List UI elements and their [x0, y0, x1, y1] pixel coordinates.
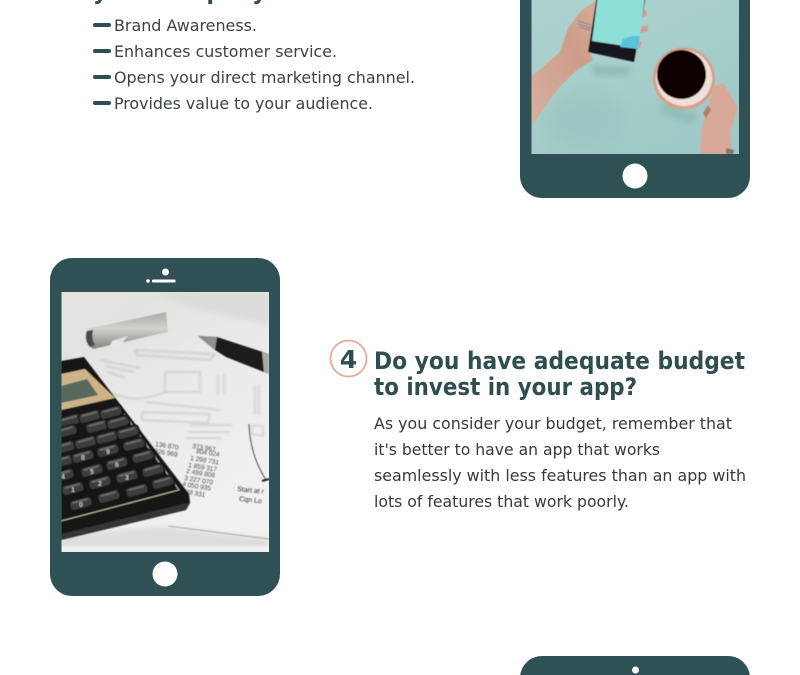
calculator key digits: 2 [98, 481, 102, 488]
printed figures on paper: 3 227 070 [184, 475, 214, 487]
calculator keys [62, 404, 176, 510]
pen [198, 336, 269, 374]
calculator key digits: 6 [115, 462, 119, 469]
calculator key digits: 9 [106, 449, 110, 456]
calculator key digits: 1 [71, 487, 75, 494]
printed figures on paper: 4 050 935 [182, 481, 212, 493]
printed figures on paper: 136 870 [155, 441, 179, 452]
photo: hands holding phone and coffee [531, 0, 739, 156]
bullet: customer service: Enhances customer service. [114, 42, 337, 61]
tablet body [50, 258, 280, 596]
home button [622, 164, 648, 188]
top section text: benefits list [93, 0, 415, 113]
tablet body [520, 656, 750, 675]
photo: calculator, pen and financial papers [49, 292, 269, 552]
calculator key digits: 8 [81, 455, 85, 462]
tablet mockup: calculator photo [49, 258, 280, 596]
bullet: brand awareness: Brand Awareness. [114, 16, 257, 35]
tablet body [520, 0, 750, 198]
bullet: value to audience: Provides value to your audience. [114, 94, 373, 113]
calculator key digits [61, 449, 129, 509]
heading: Do you have adequate budget [374, 347, 745, 375]
bullet: direct marketing: Opens your direct marketing channel. [114, 68, 415, 87]
calculator key digits: 4 [61, 474, 65, 481]
faint sketched lines on paper [100, 350, 263, 438]
printed figures on paper: 1 298 731 [190, 455, 220, 467]
body paragraph: seamlessly with less features than an app with [374, 466, 746, 485]
body paragraph: lots of features that work poorly. [374, 492, 629, 511]
tablet mockup: next section, top edge [520, 656, 750, 675]
tablet mockup: phone and coffee photo [520, 0, 750, 198]
heading: to invest in your app? [374, 373, 637, 401]
body paragraph: As you consider your budget, remember that [374, 414, 732, 433]
speaker [146, 279, 176, 283]
calculator key digits: 5 [90, 469, 94, 476]
section 4 text block [330, 340, 746, 511]
body paragraph [374, 414, 746, 511]
calculator key digits: 0 [79, 502, 83, 509]
printed figures on paper: 804 024 [196, 448, 220, 459]
body paragraph: it's better to have an app that works [374, 440, 660, 459]
printed figures on paper: 373 967 [192, 443, 216, 454]
pen cap [86, 312, 168, 349]
calculator [61, 357, 190, 540]
camera dot [162, 268, 169, 276]
home button [152, 562, 178, 586]
printed figures on paper [154, 441, 220, 499]
handwritten notes on paper: Start at r [237, 486, 265, 496]
camera dot [632, 666, 639, 674]
printed figures on paper: 2 499 808 [186, 468, 216, 480]
printed figures on paper: 926 969 [154, 448, 178, 459]
printed figures on paper: 1 859 317 [188, 462, 218, 474]
number badge [330, 340, 366, 376]
handwritten notes on paper [237, 424, 269, 505]
number badge: 4 [340, 345, 357, 374]
printed figures on paper: 6 28 331 [180, 488, 206, 499]
heading [374, 347, 745, 401]
calculator key digits: 3 [125, 475, 129, 482]
handwritten notes on paper: Cqn Lo [239, 496, 262, 505]
